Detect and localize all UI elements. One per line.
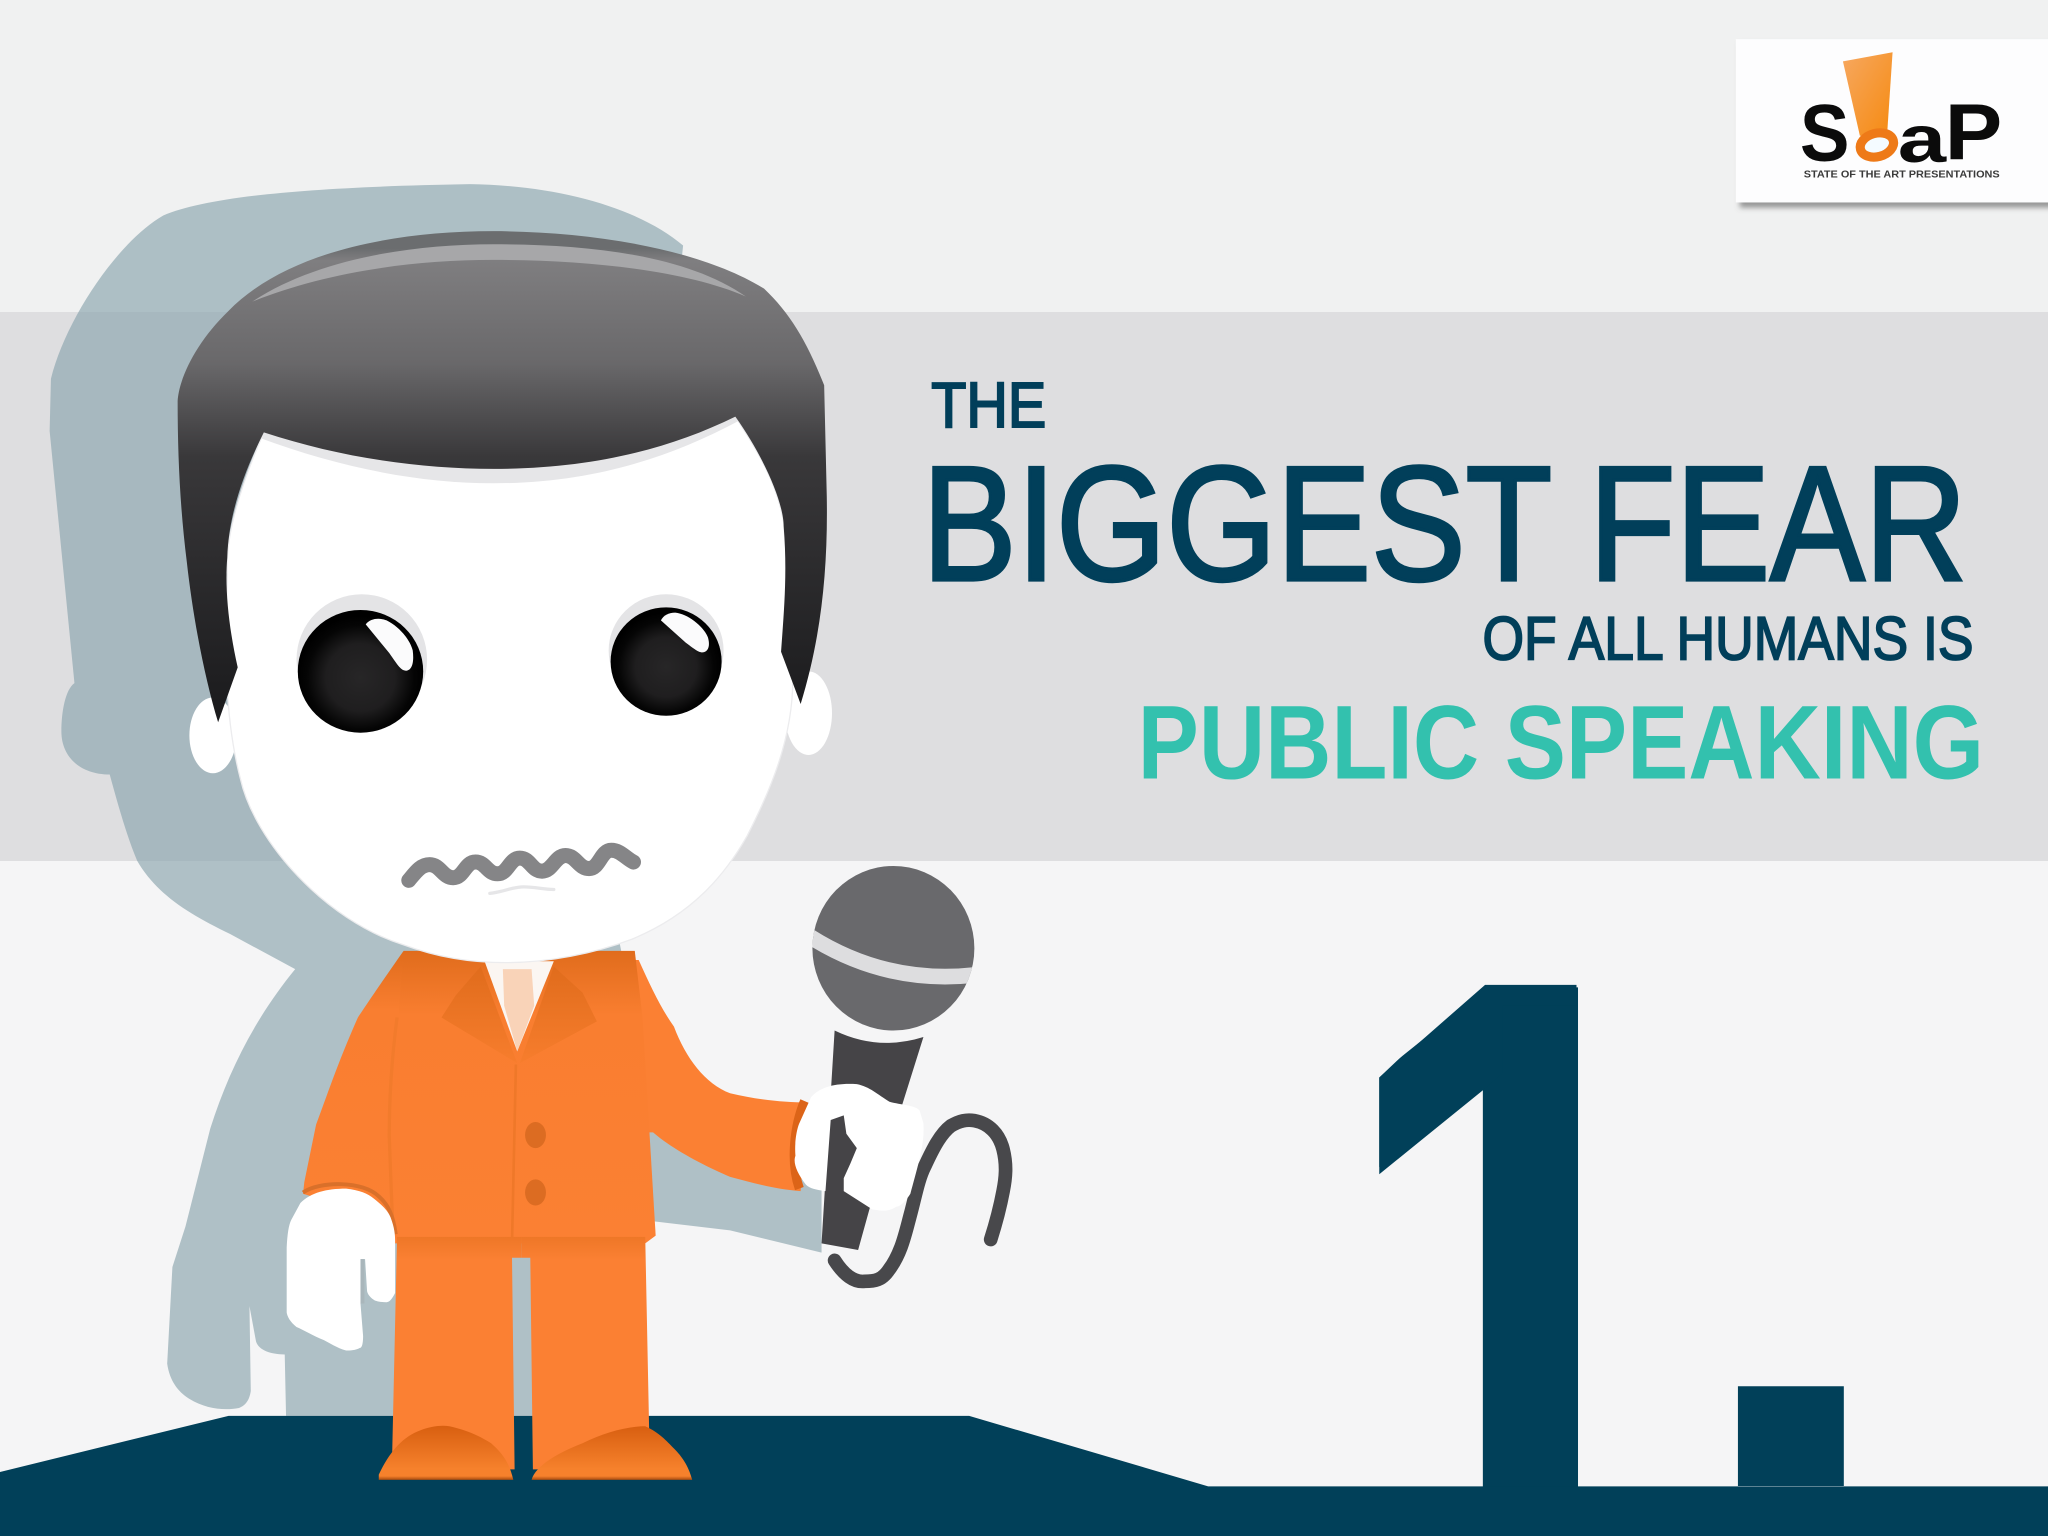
logo letter P: P	[1945, 87, 2002, 176]
left leg	[392, 1237, 521, 1469]
right leg	[521, 1237, 660, 1469]
arm seam	[389, 1017, 397, 1238]
tie	[503, 969, 534, 1051]
character shadow	[50, 184, 822, 1416]
logo tagline: STATE OF THE ART PRESENTATIONS	[1804, 170, 2000, 181]
character	[189, 671, 832, 1480]
right eye	[611, 607, 722, 716]
logo card	[1736, 39, 2048, 202]
title line: THE: THE	[931, 369, 1046, 441]
shadow under hair	[259, 405, 739, 483]
mic head	[812, 866, 974, 1031]
title line: OF ALL HUMANS IS: OF ALL HUMANS IS	[1482, 605, 1974, 674]
logo letter S: S	[1800, 89, 1849, 179]
title text	[922, 369, 1984, 801]
left cuff	[303, 1184, 396, 1234]
right shoe	[532, 1426, 692, 1480]
left eye glint	[366, 619, 413, 671]
left eye socket	[296, 594, 427, 725]
stage floor	[0, 1416, 2048, 1536]
shirt collar	[485, 961, 554, 1051]
left eye	[298, 610, 423, 733]
number one flag	[1345, 980, 1576, 1234]
title band	[0, 312, 2048, 861]
left hand	[287, 1189, 395, 1351]
lower lip	[490, 887, 554, 893]
button bottom	[525, 1179, 546, 1206]
right lapel	[520, 967, 597, 1063]
right ear	[785, 671, 832, 755]
right hand	[795, 1084, 924, 1211]
mic handle	[822, 1031, 923, 1250]
face	[226, 417, 793, 963]
logo ring	[1857, 129, 1896, 161]
jacket seam	[512, 1064, 516, 1243]
top background strip	[0, 0, 2048, 312]
right arm	[614, 960, 807, 1191]
suit jacket and arms	[303, 951, 807, 1243]
logo exclamation mark	[1843, 52, 1893, 136]
hand crease	[361, 1259, 364, 1304]
sleeve cuff	[794, 1101, 805, 1189]
head	[178, 231, 827, 963]
left lapel	[441, 967, 517, 1063]
left shoe	[379, 1426, 513, 1480]
mic cable	[835, 1120, 1006, 1281]
button top	[525, 1122, 546, 1148]
torso	[389, 951, 656, 1243]
legs	[392, 1237, 660, 1469]
right eye socket	[609, 594, 724, 707]
mic band	[810, 936, 980, 977]
right eye glint	[661, 613, 709, 652]
hair	[178, 231, 827, 722]
wavy mouth	[409, 850, 633, 880]
hair highlight	[252, 244, 746, 302]
microphone	[795, 866, 1006, 1281]
left arm	[303, 951, 418, 1221]
logo letter a: a	[1898, 103, 1947, 177]
left ear	[189, 697, 236, 773]
